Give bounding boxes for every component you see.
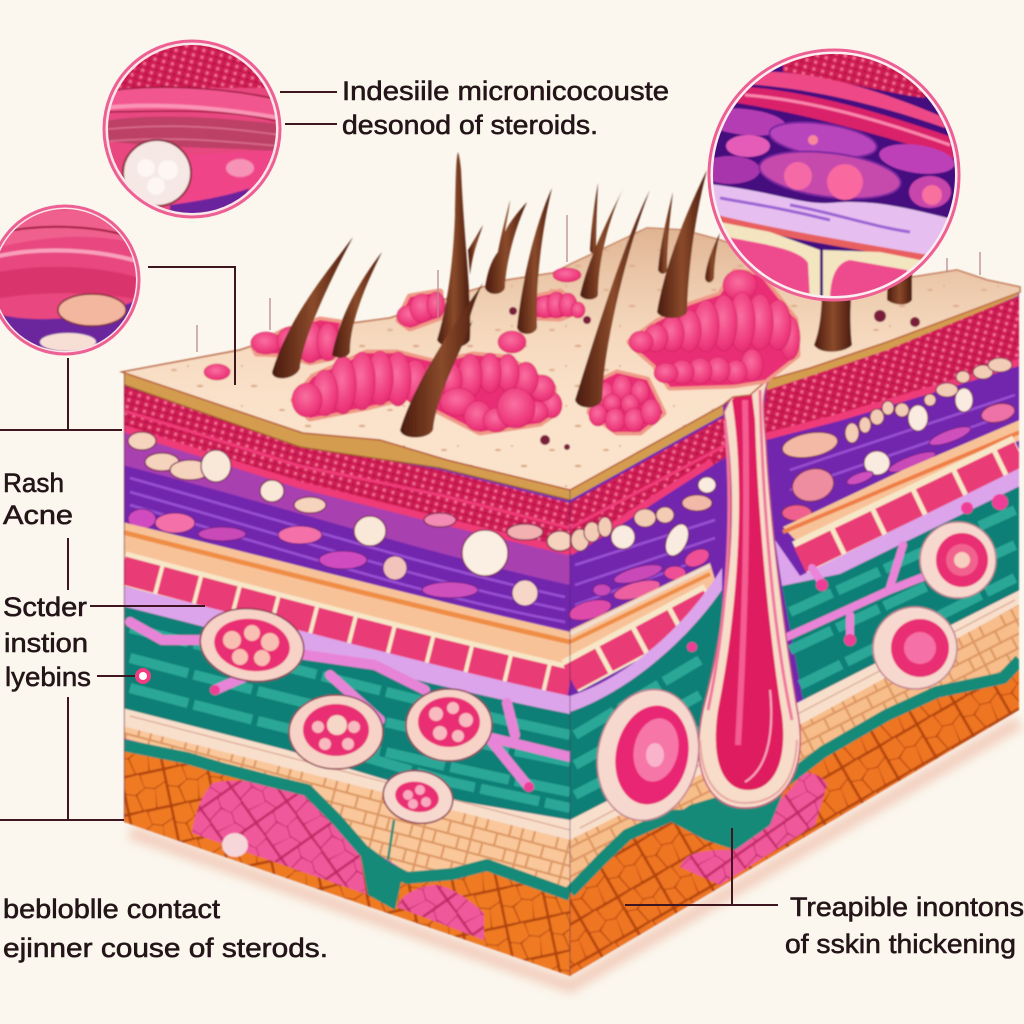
gland: right upper [920,522,996,598]
vessel branches, left [130,622,612,786]
marker dot on lyebins line [135,668,151,684]
lilac band, right [570,568,722,712]
surface pores [509,307,920,450]
lesion: upper left [251,321,339,363]
teal tissue, left [122,606,570,820]
lesion: upper right of centre [535,292,585,318]
skin block cross-section [122,152,1020,976]
right face of the block [566,288,1020,976]
cream nodules, left [128,432,573,576]
magenta cells, left [128,509,538,606]
fatty nodule row, left [124,432,570,586]
cream and orange stripes, right [569,562,716,656]
teal tissue, right [570,590,722,820]
pink lobule, right [680,773,827,885]
label: left side terms: Sctder [3,592,87,622]
gland: centre [289,695,383,769]
gland: centre right [406,689,492,761]
gland: lower [379,765,457,829]
lesion: upper middle [397,292,445,327]
lilac band, left [122,586,570,716]
vessels, right [787,545,923,640]
label: left side terms: lyebins [5,662,91,692]
label: bottom right: of sskin thickening [785,929,1016,959]
label: bottom left: bebloblle contact [3,894,221,924]
lesion: far small [553,268,581,282]
label: rash and acne: Rash [3,468,64,498]
label: bottom right: Treapible inontons [790,892,1024,922]
lesion: small oval [498,331,526,353]
orange fat cells, left [122,745,570,976]
label: top heading: desonod of steroids. [342,110,598,140]
inset circle: left [0,205,140,355]
label: bottom left: ejinner couse of sterods. [3,933,328,963]
orange wavy stripes, left [122,522,570,668]
inset circle: magnifier top right [700,50,970,310]
pink lobule, bottom [397,885,484,940]
gland: right lower [873,607,957,689]
label: left side terms: instion [4,628,88,658]
purple lines, right [575,395,1015,605]
lesion: small far left [204,364,230,380]
label: left side terms [3,592,91,692]
orange fat cells, right [570,660,1020,976]
lesion: clustered lobes [589,375,661,432]
gland: large bulb [585,680,711,830]
label: top heading [342,76,669,140]
hairs [272,152,912,438]
label: rash and acne [3,468,73,530]
sebaceous glands [195,522,996,830]
pink lobule, left [192,781,366,894]
pink cells, right [570,600,712,676]
pink cell row, left [122,568,570,682]
peach cells, right [570,604,1020,890]
white stripe, right [570,590,1020,842]
lesion: large right [629,270,800,384]
inset circle: top [100,40,290,225]
purple cells [721,107,786,137]
gold strip under surface, left [122,372,570,500]
white stripe, left [122,708,570,842]
left face of the block [122,372,612,976]
dermal papillae [700,218,820,300]
leader lines [0,92,778,905]
teal band, left [122,745,570,895]
label: rash and acne: Acne [3,500,73,530]
inflamed lesions on surface [204,268,800,432]
top skin surface [122,228,1020,490]
lilac band [713,183,948,256]
label: bottom right [785,892,1024,959]
red epidermis band, left [122,385,570,548]
peach cell layer, left [122,726,570,892]
teal band, right [570,660,1020,892]
purple dermis band, left [122,465,570,630]
gold strip, right [570,405,723,500]
red band, right [570,416,730,548]
cream nodules, right [571,358,1016,560]
magenta cells, right [566,423,973,624]
label: bottom left [3,894,328,963]
small tick lines on surface [197,215,980,352]
label: top heading: Indesiile micronicocouste [342,76,669,106]
gland: left upper [195,602,309,688]
lesion base shapes [254,272,797,432]
hair follicle [699,372,800,808]
lesion: large centre [292,351,562,432]
